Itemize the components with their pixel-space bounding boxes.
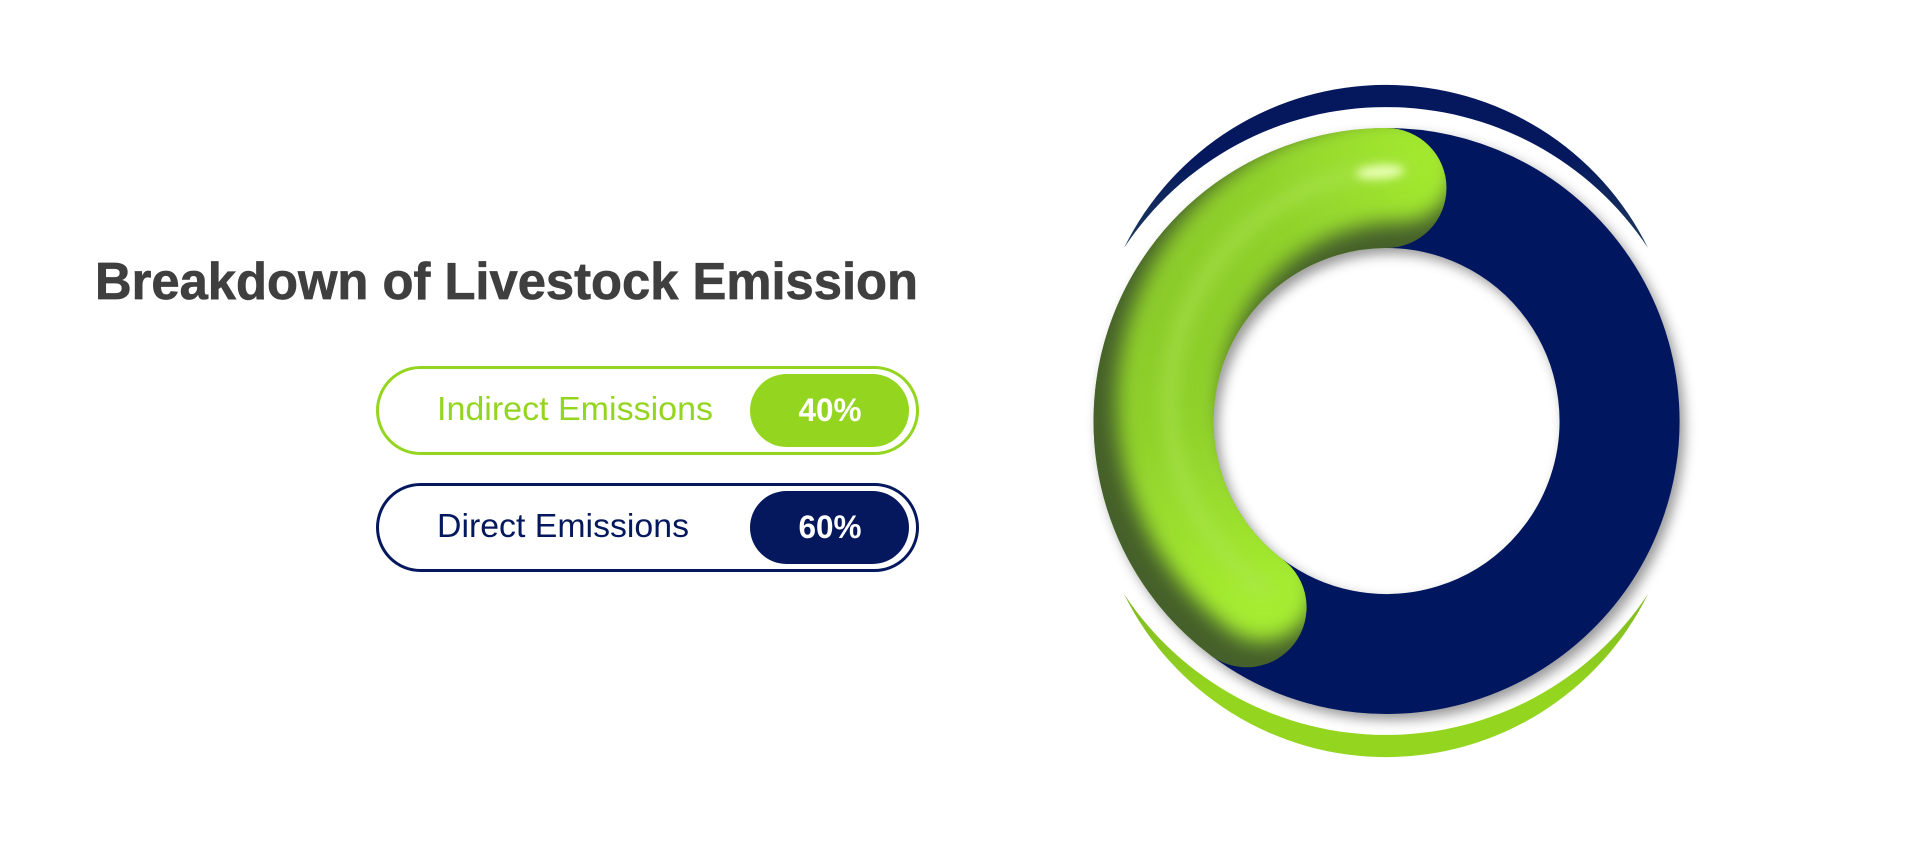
donut ring: direct emissions 60% xyxy=(1154,188,1620,654)
infographic canvas xyxy=(98,84,1692,758)
value badge: 60%: 60% xyxy=(798,509,862,545)
pill outline: indirect xyxy=(378,368,918,454)
title: Breakdown of Livestock Emission xyxy=(95,253,918,311)
label: direct emissions: Direct Emissions xyxy=(437,507,689,544)
crescent: top navy xyxy=(1124,85,1648,248)
value badge: 60% xyxy=(750,491,909,564)
label: indirect emissions: Indirect Emissions xyxy=(437,390,713,427)
donut chart xyxy=(1124,85,1648,757)
legend item: direct emissions xyxy=(378,484,918,570)
value badge: 40%: 40% xyxy=(798,392,862,428)
value badge: 40% xyxy=(750,374,909,447)
specular highlight xyxy=(1356,163,1404,181)
donut segment: indirect emissions 40% xyxy=(1154,163,1404,607)
pill outline: direct xyxy=(378,484,918,570)
crescent: bottom green xyxy=(1124,594,1648,757)
legend item: indirect emissions xyxy=(378,368,918,454)
